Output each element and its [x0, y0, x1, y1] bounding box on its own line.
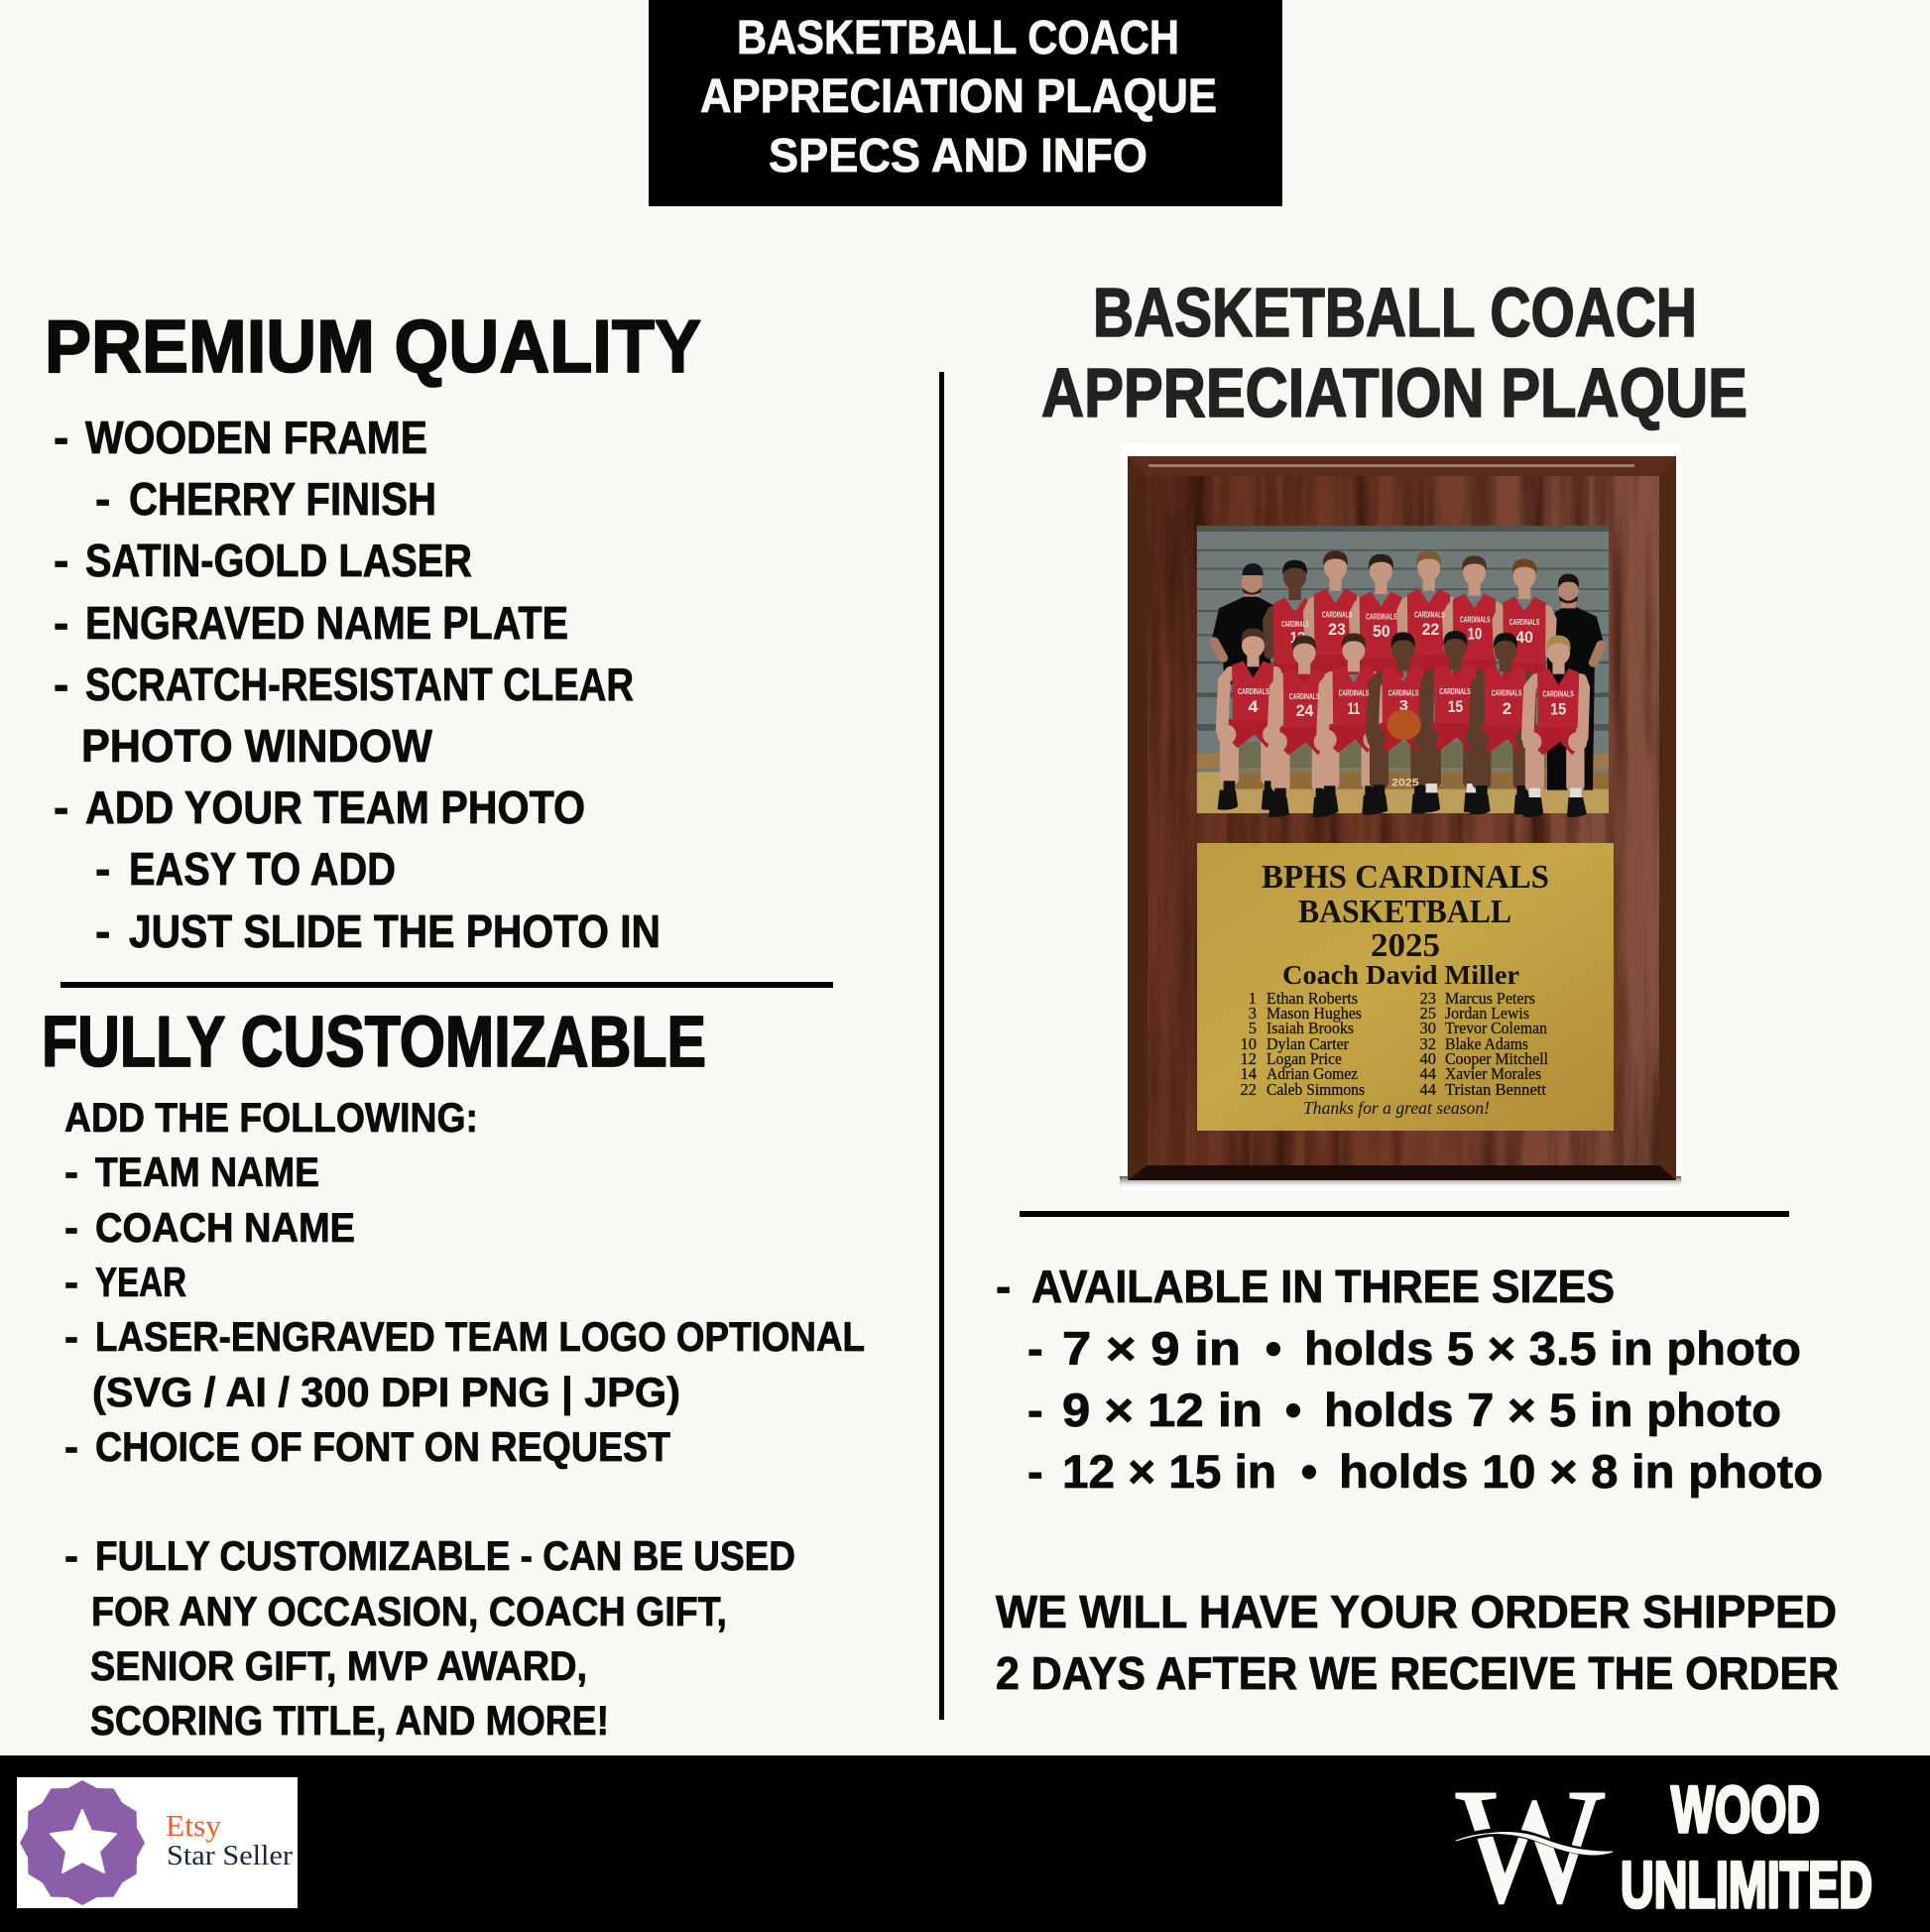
- front row players: 15: [1550, 700, 1566, 718]
- roster: right column: Jordan Lewis: [1445, 1004, 1529, 1023]
- feature list: premium quality: -: [95, 843, 110, 895]
- feature list: premium quality: -: [54, 782, 68, 833]
- feature list: premium quality: -: [95, 473, 110, 525]
- roster: left column: Dylan Carter: [1267, 1034, 1349, 1053]
- panel: available sizes: holds 10 × 8 in photo: [1339, 1445, 1823, 1498]
- front row players: CARDINALS: [1289, 692, 1319, 701]
- gold name plate: BASKETBALL: [1298, 894, 1511, 930]
- roster: right column: Blake Adams: [1445, 1034, 1528, 1053]
- header banner: APPRECIATION PLAQUE: [700, 70, 1217, 123]
- panel: available sizes: 9 × 12 in: [1062, 1384, 1263, 1436]
- badge: etsy star seller: [17, 1777, 298, 1908]
- panel: available sizes: •: [1266, 1322, 1281, 1375]
- roster: right column: Trevor Coleman: [1445, 1019, 1547, 1037]
- roster: right column: 40: [1420, 1049, 1436, 1068]
- feature list: premium quality: SATIN-GOLD LASER: [85, 535, 472, 586]
- front row players: 2: [1503, 699, 1511, 718]
- front row players: 3: [1399, 698, 1408, 714]
- panel: available sizes: -: [1027, 1445, 1043, 1498]
- back row players: 12: [1290, 630, 1305, 647]
- panel: available sizes: -: [1027, 1322, 1043, 1375]
- team photo: 2025: [1391, 776, 1419, 788]
- roster: left column: 10: [1240, 1034, 1257, 1053]
- feature list: premium quality: ENGRAVED NAME PLATE: [85, 597, 568, 649]
- back row players: CARDINALS: [1322, 610, 1352, 620]
- header banner: BASKETBALL COACH: [737, 12, 1179, 64]
- back row players: CARDINALS: [1509, 618, 1539, 627]
- roster: left column: 12: [1240, 1049, 1257, 1068]
- roster: left column: Isaiah Brooks: [1267, 1019, 1354, 1037]
- panel: available sizes: -: [996, 1261, 1011, 1312]
- panel: available sizes: •: [1301, 1445, 1317, 1498]
- front row players: 15: [1448, 697, 1463, 716]
- icon: W monogram with swoosh: W: [1456, 1754, 1605, 1932]
- roster: right column: 32: [1420, 1034, 1436, 1053]
- panel: fully customizable: [42, 1003, 865, 1744]
- roster: left column: Mason Hughes: [1267, 1004, 1362, 1023]
- feature list: premium quality: WOODEN FRAME: [85, 412, 427, 463]
- shipping note: WE WILL HAVE YOUR ORDER SHIPPED: [996, 1586, 1837, 1637]
- roster: left column: Adrian Gomez: [1267, 1064, 1358, 1083]
- customization list: -: [64, 1148, 78, 1195]
- feature list: premium quality: -: [95, 906, 110, 957]
- back row players: CARDINALS: [1281, 620, 1309, 629]
- roster: left column: [1240, 989, 1365, 1099]
- roster: right column: 25: [1420, 1004, 1436, 1023]
- back row players: [1268, 550, 1551, 683]
- customization list: -: [64, 1532, 78, 1579]
- feature list: premium quality: -: [54, 535, 68, 586]
- customization list: YEAR: [95, 1259, 186, 1305]
- back row players: CARDINALS: [1414, 610, 1445, 620]
- wooden plaque frame: [1128, 456, 1676, 1180]
- roster: right column: Xavier Morales: [1445, 1064, 1541, 1083]
- front row players: CARDINALS: [1542, 689, 1574, 699]
- heading: fully customizable: FULLY CUSTOMIZABLE: [42, 1003, 706, 1082]
- team photo: [1197, 526, 1609, 817]
- customization list: [64, 1094, 865, 1744]
- customization list: LASER-ENGRAVED TEAM LOGO OPTIONAL: [95, 1313, 865, 1360]
- panel: available sizes: [996, 1261, 1823, 1498]
- back row players: 10: [1468, 625, 1482, 643]
- roster: left column: 1: [1249, 989, 1257, 1008]
- roster: left column: 5: [1249, 1019, 1257, 1037]
- panel: available sizes: holds 7 × 5 in photo: [1324, 1384, 1781, 1436]
- coaches: [1211, 563, 1604, 790]
- back row players: CARDINALS: [1366, 612, 1397, 622]
- panel: available sizes: -: [1027, 1384, 1043, 1436]
- front row players: 11: [1348, 699, 1360, 718]
- customization list: CHOICE OF FONT ON REQUEST: [95, 1423, 670, 1470]
- roster: left column: Logan Price: [1267, 1049, 1342, 1068]
- plaque product image: [1120, 443, 1681, 1190]
- customization list: FULLY CUSTOMIZABLE - CAN BE USED: [95, 1532, 795, 1579]
- gold name plate: Thanks for a great season!: [1303, 1098, 1490, 1118]
- feature list: premium quality: -: [54, 412, 68, 463]
- panel: available sizes: AVAILABLE IN THREE SIZES: [1031, 1261, 1615, 1312]
- icon: star seller rosette: [20, 1780, 145, 1905]
- panel: available sizes: •: [1285, 1384, 1301, 1436]
- logo: wood unlimited: [1454, 1754, 1872, 1932]
- gold name plate: Coach David Miller: [1282, 960, 1519, 990]
- feature list: premium quality: JUST SLIDE THE PHOTO IN: [129, 906, 661, 957]
- feature list: premium quality: -: [54, 659, 68, 710]
- feature list: premium quality: CHERRY FINISH: [129, 473, 436, 525]
- front row players: 24: [1296, 701, 1313, 720]
- gold name plate: 2025: [1371, 927, 1440, 964]
- customization list: -: [64, 1204, 78, 1251]
- roster: right column: [1420, 989, 1548, 1099]
- front row players: CARDINALS: [1439, 687, 1471, 696]
- logo: wood unlimited: WOOD: [1671, 1772, 1820, 1846]
- header banner: [649, 0, 1282, 206]
- customization list: -: [64, 1313, 78, 1360]
- customization list: SCORING TITLE, AND MORE!: [90, 1697, 609, 1744]
- feature list: premium quality: SCRATCH-RESISTANT CLEAR: [85, 659, 634, 710]
- back row players: 22: [1422, 620, 1439, 639]
- front row players: CARDINALS: [1388, 688, 1418, 697]
- front row players: CARDINALS: [1492, 688, 1521, 698]
- customization list: -: [64, 1259, 78, 1305]
- panel: available sizes: 12 × 15 in: [1062, 1445, 1276, 1498]
- roster: right column: Marcus Peters: [1445, 989, 1535, 1008]
- feature list: premium quality: -: [54, 597, 68, 649]
- header banner: SPECS AND INFO: [769, 130, 1147, 182]
- customization list: -: [64, 1423, 78, 1470]
- panel: premium quality: [45, 304, 701, 957]
- roster: left column: 22: [1240, 1080, 1257, 1099]
- roster: left column: 14: [1240, 1064, 1257, 1083]
- roster: right column: 44: [1420, 1080, 1436, 1099]
- gold name plate: [1197, 843, 1614, 1131]
- panel: available sizes: 7 × 9 in: [1062, 1322, 1241, 1375]
- panel: available sizes: holds 5 × 3.5 in photo: [1304, 1322, 1801, 1375]
- basketball: [1387, 709, 1421, 740]
- feature list: premium quality: EASY TO ADD: [129, 843, 396, 895]
- customization list: TEAM NAME: [95, 1148, 319, 1195]
- back row players: 50: [1373, 622, 1390, 641]
- roster: left column: Caleb Simmons: [1267, 1080, 1365, 1099]
- front row players: CARDINALS: [1339, 688, 1369, 697]
- footer bar: [0, 1754, 1930, 1932]
- back row players: CARDINALS: [1460, 615, 1491, 624]
- roster: right column: Tristan Bennett: [1445, 1080, 1546, 1099]
- gold name plate: BPHS CARDINALS: [1262, 859, 1549, 896]
- roster: right column: 23: [1420, 989, 1436, 1008]
- customization list: ADD THE FOLLOWING:: [64, 1094, 478, 1141]
- heading: plaque title: BASKETBALL COACH: [1093, 274, 1697, 351]
- roster: right column: 30: [1420, 1019, 1436, 1037]
- front row players: [1217, 628, 1587, 817]
- back row players: 23: [1328, 620, 1346, 639]
- customization list: (SVG / AI / 300 DPI PNG | JPG): [92, 1369, 680, 1416]
- badge: etsy star seller: Etsy: [166, 1808, 221, 1843]
- customization list: SENIOR GIFT, MVP AWARD,: [90, 1642, 587, 1689]
- roster: left column: 3: [1249, 1004, 1257, 1023]
- heading: premium quality: PREMIUM QUALITY: [45, 304, 701, 388]
- roster: right column: 44: [1420, 1064, 1436, 1083]
- heading: plaque title: APPRECIATION PLAQUE: [1041, 354, 1748, 431]
- feature list: premium quality: PHOTO WINDOW: [81, 720, 433, 772]
- roster: right column: Cooper Mitchell: [1445, 1049, 1548, 1068]
- feature list: premium quality: [54, 412, 661, 957]
- shipping note: 2 DAYS AFTER WE RECEIVE THE ORDER: [996, 1647, 1839, 1699]
- front row players: 4: [1249, 697, 1258, 716]
- shipping note: [996, 1586, 1839, 1699]
- back row players: 40: [1515, 628, 1533, 647]
- customization list: FOR ANY OCCASION, COACH GIFT,: [91, 1588, 727, 1634]
- feature list: premium quality: ADD YOUR TEAM PHOTO: [85, 782, 585, 833]
- roster: left column: Ethan Roberts: [1267, 989, 1358, 1008]
- front row players: CARDINALS: [1238, 687, 1269, 696]
- customization list: COACH NAME: [95, 1204, 355, 1251]
- badge: etsy star seller: Star Seller: [167, 1840, 293, 1872]
- heading: plaque title: [1041, 274, 1748, 431]
